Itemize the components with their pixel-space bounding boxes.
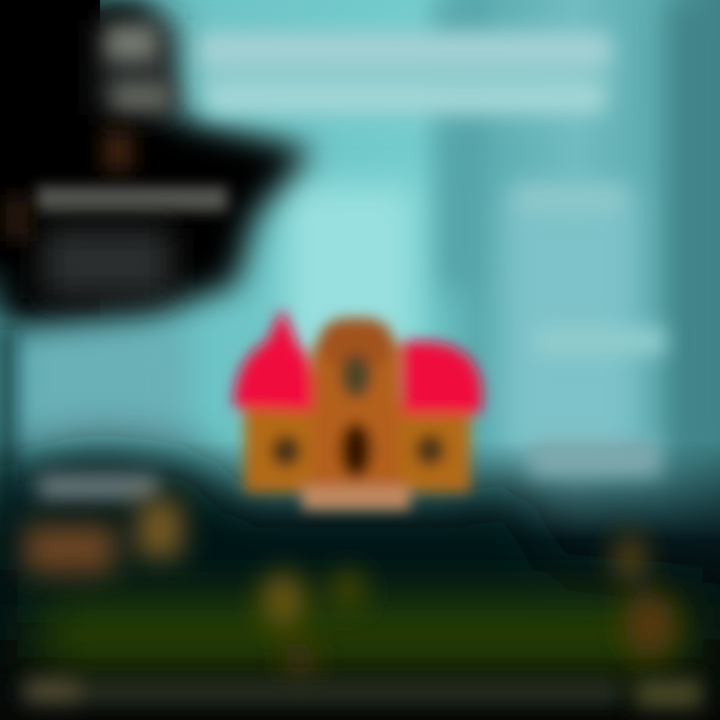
left text block: body lines [42,228,172,298]
title start words backing [100,20,175,115]
right text labels [515,186,665,476]
house walls [244,318,470,510]
silhouette edge fill [0,0,100,320]
small ornament: amber mark [103,130,133,172]
title start words [106,26,170,110]
left amber accent [6,195,28,241]
title backing haze [200,35,605,110]
ground: dark base [0,440,720,720]
title text: blurred lines [198,36,610,110]
left edge shadow [0,330,12,570]
icon: house with red roofs [234,308,482,510]
lower left amber blocks [24,500,182,574]
ground: dark hills [0,450,720,640]
lower left label [38,474,158,500]
green grass strip [40,605,690,665]
background: window panels [25,0,720,460]
title line 1 [198,36,610,64]
dark tree silhouette top left [0,0,312,325]
right red roof [402,341,482,414]
left red roof [234,308,312,412]
bottom dark band [0,710,720,720]
left text block: heading [36,186,228,212]
flowers in grass [261,534,676,680]
footer text strip [20,678,702,708]
title line 2 [208,86,603,110]
house windows and door [271,354,445,478]
